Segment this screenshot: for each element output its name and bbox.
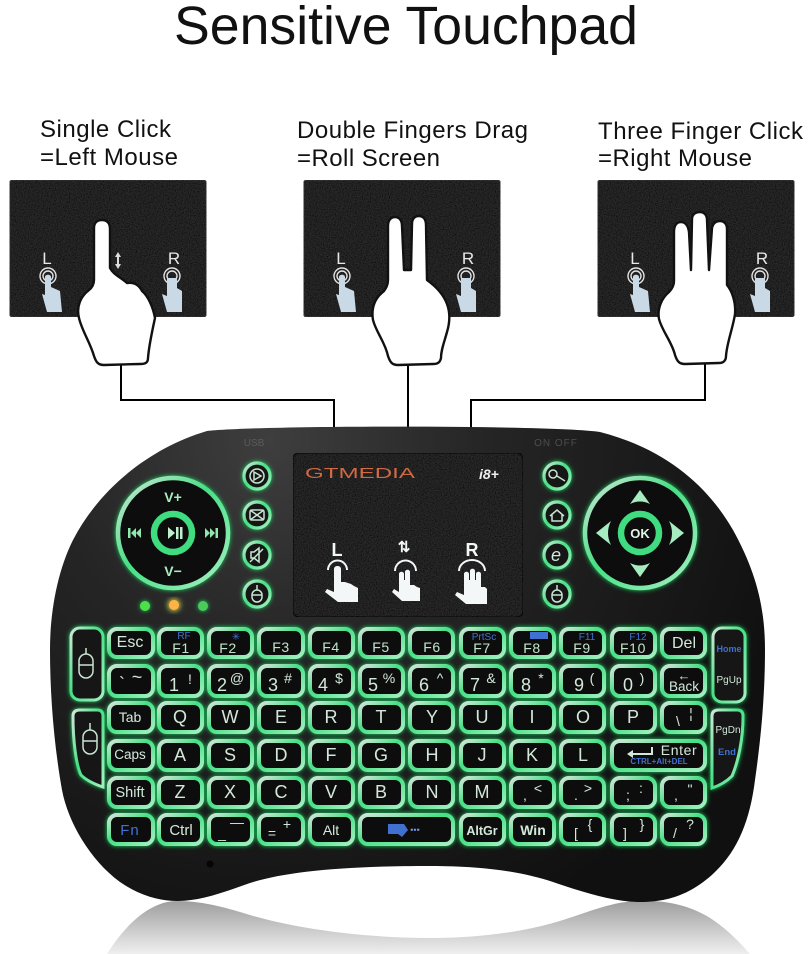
caption: single click: Single Click (40, 116, 172, 143)
key row 3: U (476, 707, 488, 727)
key row 3 (109, 703, 705, 732)
key row 1: F12 (629, 632, 647, 643)
key row 5 (109, 778, 705, 807)
panel: three finger touchpad: R (756, 249, 768, 268)
key row 1: Esc (117, 634, 143, 651)
key row 1: F9 (573, 640, 591, 656)
key row 5: B (375, 782, 387, 802)
side key: PgDn / End (712, 710, 743, 788)
key row 2: % (383, 670, 395, 686)
microphone hole (206, 860, 214, 868)
panel: single click touchpad: L (42, 249, 52, 268)
side key: Home / PgUp (713, 628, 745, 702)
key row 1 (109, 629, 705, 657)
key row 1: F2 (219, 640, 237, 656)
key row 3: E (275, 707, 287, 727)
side key: PgDn / End: End (718, 747, 736, 758)
label: ON OFF: ON OFF (534, 438, 578, 449)
key row 6: _ (217, 825, 226, 841)
key row 5: > (584, 780, 592, 796)
key row 2: 6 (419, 675, 429, 695)
d-pad ring: OK (630, 526, 650, 541)
key row 6: Fn (120, 822, 140, 839)
key row 6 (109, 814, 705, 844)
key row 1: F10 (620, 640, 646, 656)
key row 2: ! (188, 671, 192, 687)
icon: hand one finger (78, 220, 155, 365)
media control ring: V+ (164, 489, 182, 505)
icon: hand two fingers (372, 216, 449, 365)
key row 4: D (274, 745, 288, 765)
panel: single click touchpad: R (168, 249, 180, 268)
key row 4: F (326, 745, 336, 765)
key row 5: N (426, 782, 438, 802)
key row 6: / (673, 825, 677, 841)
caption: three finger click (598, 118, 804, 172)
key row 1: F3 (272, 639, 290, 655)
touchpad scroll icon: ⇅ (398, 539, 411, 556)
key row 5: " (688, 781, 693, 797)
touchpad L icon (325, 540, 358, 602)
left function buttons (244, 463, 270, 607)
icon: up-down arrow (115, 252, 121, 269)
key row 3: ¦ (689, 705, 693, 721)
key row 4: K (526, 745, 538, 765)
icon: hand three fingers (659, 212, 735, 364)
key row 4: Caps (114, 747, 146, 762)
key row 2: $ (335, 670, 343, 686)
caption: three finger click: Three Finger Click (598, 118, 804, 145)
key row 1: RF (177, 631, 191, 642)
side key: Home / PgUp: PgUp (716, 675, 742, 686)
key row 6: ••• (410, 825, 420, 835)
touchpad L icon: L (332, 540, 342, 560)
key row 4: S (224, 745, 236, 765)
key row 2: & (486, 670, 496, 686)
key row 3: W (222, 707, 238, 727)
key row 1: F11 (579, 632, 596, 643)
key row 6: Alt (323, 822, 339, 838)
key row 3: O (576, 707, 590, 727)
key row 4: J (478, 745, 486, 765)
key row 6: Ctrl (169, 822, 193, 839)
caption: double fingers drag (297, 117, 528, 172)
key row 2: # (284, 670, 292, 686)
key row 2: 1 (169, 675, 179, 695)
key row 2: 8 (521, 675, 531, 695)
key row 2: 0 (623, 675, 633, 695)
key row 1: F6 (423, 639, 441, 655)
key row 2: 9 (574, 675, 584, 695)
key row 2: 2 (217, 675, 227, 695)
key row 1: F4 (322, 639, 340, 655)
key row 2: ~ (132, 667, 142, 687)
key row 4: A (174, 745, 186, 765)
panel: double finger touchpad: R (462, 249, 474, 268)
d-pad ring (585, 478, 695, 588)
key row 3: Y (426, 707, 438, 727)
key row 6: } (640, 816, 645, 832)
key row 4: CTRL+Alt+DEL (630, 757, 688, 766)
caption: three finger click: =Right Mouse (598, 145, 752, 172)
key row 3: P (627, 707, 639, 727)
key row 5: : (639, 780, 643, 796)
key row 5: C (274, 782, 288, 802)
brand: GTMEDIA: GTMEDIA (305, 465, 415, 482)
touchpad (293, 453, 523, 617)
key row 2: 5 (368, 675, 378, 695)
key row 4: G (374, 745, 388, 765)
touchpad R icon (455, 540, 487, 604)
key row 1: F7 (473, 640, 491, 656)
key row 2: @ (230, 670, 244, 686)
key row 5: V (325, 782, 337, 802)
key row 1: PrtSc (472, 632, 496, 643)
key row 5: ; (626, 787, 630, 803)
key row 4: Enter (661, 742, 697, 758)
key row 2: * (538, 670, 544, 686)
key row 6: AltGr (466, 824, 498, 838)
key row 2: ( (590, 670, 595, 686)
panel: double finger touchpad (304, 180, 500, 317)
panel: single click touchpad (10, 180, 206, 317)
key row 2: ^ (437, 670, 444, 686)
key row 2: 4 (318, 675, 328, 695)
panel: three finger touchpad (598, 180, 794, 317)
caption: double fingers drag: =Roll Screen (297, 145, 440, 172)
key row 6: + (283, 816, 291, 832)
panel: double finger touchpad: L (336, 249, 346, 268)
side key: Home / PgUp: Home (716, 644, 742, 654)
right function buttons (544, 463, 570, 607)
caption: single click (40, 116, 178, 171)
key row 1: Del (672, 635, 696, 652)
key row 5: Shift (115, 785, 145, 801)
key row 2: Back (669, 679, 699, 694)
key row 5: M (474, 782, 490, 802)
indicator lights (140, 600, 208, 611)
key row 2: ` (119, 674, 125, 694)
key row 4 (109, 741, 705, 770)
media control ring (118, 478, 228, 588)
label: USB: USB (244, 438, 265, 449)
key row 3: Tab (119, 709, 141, 725)
key row 6: Win (520, 822, 546, 838)
key row 2: 3 (268, 675, 278, 695)
touchpad scroll icon (392, 539, 420, 601)
model: i8+: i8+ (479, 466, 499, 482)
right function buttons: e (551, 545, 561, 565)
key row 1: F8 (523, 640, 541, 656)
touchpad R icon: R (466, 540, 478, 560)
key row 2: 7 (470, 675, 480, 695)
key row 5: , (674, 787, 678, 803)
key row 3: I (529, 707, 535, 727)
key row 2: ← (678, 668, 690, 683)
media control ring: V− (164, 563, 182, 579)
reflection (107, 901, 750, 954)
key row 6: ? (686, 816, 694, 832)
key row 6: [ (574, 825, 578, 841)
keyboard body (50, 427, 765, 902)
side key: mouse left (71, 628, 103, 700)
key row 2: ) (640, 670, 644, 686)
key row 3: Q (173, 707, 187, 727)
key row 6: ] (623, 825, 627, 841)
side key: mouse right (73, 710, 103, 787)
key row 6: — (230, 814, 244, 830)
connector line: double fingers (407, 362, 409, 535)
key row 3: R (324, 707, 338, 727)
key row 1: ✳ (232, 632, 240, 643)
caption: single click: =Left Mouse (40, 144, 178, 171)
key row 5: Z (174, 782, 186, 802)
key row 6: = (268, 825, 276, 841)
key row 1: F1 (172, 640, 190, 656)
panel: three finger touchpad: L (630, 249, 640, 268)
side key: PgDn / End: PgDn (715, 725, 741, 736)
key row 1: F5 (372, 639, 390, 655)
key row 5: X (224, 782, 236, 802)
caption: double fingers drag: Double Fingers Drag (297, 117, 528, 144)
connector line: single click (121, 365, 334, 530)
connector line: three fingers (471, 362, 705, 530)
key row 4: L (578, 745, 588, 765)
key row 5: , (523, 787, 527, 803)
key row 3: \ (676, 713, 680, 729)
key row 6: { (588, 816, 593, 832)
key row 5: < (534, 780, 542, 796)
key row 2 (109, 666, 705, 696)
key row 3: T (376, 707, 386, 727)
key row 4: H (426, 745, 438, 765)
key row 5: . (574, 787, 578, 803)
